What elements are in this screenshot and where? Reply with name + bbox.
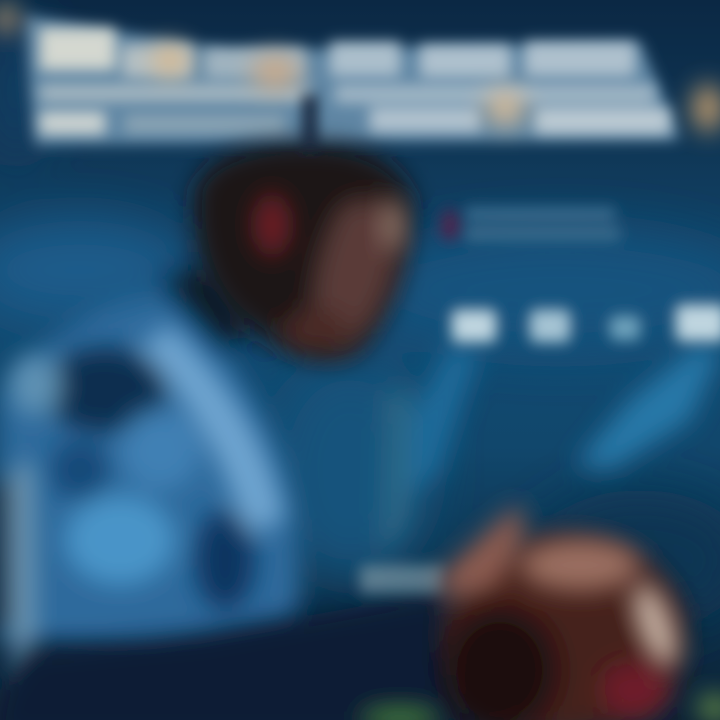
jersey highlights and shadows	[10, 325, 285, 610]
eye highlight	[380, 199, 404, 251]
icon: red dot	[440, 209, 460, 241]
ball highlights	[445, 539, 670, 720]
collar	[165, 265, 255, 345]
forearm light	[360, 565, 445, 593]
title	[0, 4, 720, 145]
ball white seam	[625, 578, 685, 672]
football and hand	[360, 505, 687, 720]
hand	[440, 505, 524, 600]
jersey	[0, 295, 300, 650]
ball body	[443, 535, 687, 720]
head	[194, 144, 412, 360]
white buttons row	[452, 305, 720, 342]
player	[0, 95, 470, 720]
ear	[254, 193, 290, 257]
green field	[360, 694, 720, 720]
lower dark arm	[0, 590, 470, 720]
light beams	[380, 345, 720, 560]
hair spike	[302, 95, 318, 150]
subtitle	[440, 208, 620, 241]
sleeve edge	[0, 460, 34, 690]
face	[280, 198, 400, 352]
